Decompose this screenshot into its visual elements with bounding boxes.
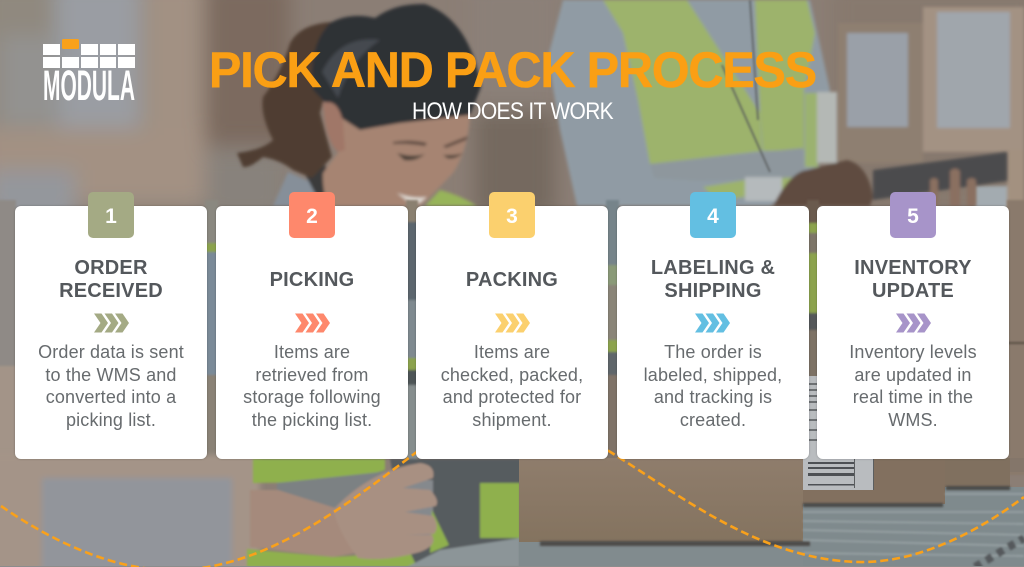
- dashed wave line: [1, 430, 1024, 567]
- description 4: created.: [680, 410, 746, 430]
- description 1: picking list.: [66, 410, 156, 430]
- heading 1: ORDER: [74, 257, 148, 279]
- description 1: Order data is sent: [38, 342, 184, 362]
- woman: [237, 4, 481, 206]
- badge 1: 1: [105, 205, 117, 228]
- bottom scene: [0, 455, 260, 567]
- subtitle: HOW DOES IT WORK: [412, 98, 614, 125]
- badge 5: [890, 192, 936, 238]
- description 2: retrieved from: [255, 365, 369, 385]
- panel: step 5 inventory update: [817, 192, 1009, 459]
- description 5: WMS.: [888, 410, 938, 430]
- panel: step 1 order received: [15, 192, 207, 459]
- description 2: Items are: [274, 342, 350, 362]
- heading 4: LABELING &: [651, 257, 775, 279]
- heading 4: SHIPPING: [664, 280, 762, 302]
- heading 3: PACKING: [466, 269, 558, 291]
- chevrons 1: [94, 314, 129, 332]
- badge 4: [690, 192, 736, 238]
- badge 5: 5: [907, 205, 919, 228]
- heading 5: INVENTORY: [854, 257, 972, 279]
- title: PICK AND PACK PROCESS: [209, 42, 816, 98]
- right background boxes: [838, 7, 1024, 210]
- right worker: [548, 0, 1007, 206]
- shipping label: [803, 376, 874, 490]
- description 4: The order is: [664, 342, 762, 362]
- foreground boxes: [519, 458, 1024, 542]
- badge 4: 4: [707, 205, 719, 228]
- heading 5: UPDATE: [872, 280, 954, 302]
- panel: step 3 packing: [416, 192, 608, 459]
- description 3: checked, packed,: [441, 365, 583, 385]
- conveyor: [0, 486, 1024, 567]
- heading 1: RECEIVED: [59, 280, 163, 302]
- panel: step 2 picking: [216, 192, 408, 459]
- chevrons 2: [295, 314, 330, 332]
- chevrons 5: [896, 314, 931, 332]
- badge 3: [489, 192, 535, 238]
- description 2: storage following: [243, 387, 381, 407]
- description 2: the picking list.: [252, 410, 372, 430]
- logo: [43, 39, 135, 110]
- badge 2: 2: [306, 205, 318, 228]
- description 5: real time in the: [853, 387, 973, 407]
- description 1: to the WMS and: [45, 365, 177, 385]
- text: MODULA: [43, 62, 135, 110]
- chevrons 3: [495, 314, 530, 332]
- description 3: Items are: [474, 342, 550, 362]
- badge 2: [289, 192, 335, 238]
- gaps between cards: [0, 200, 1024, 475]
- description 3: and protected for: [443, 387, 581, 407]
- chevrons 4: [695, 314, 730, 332]
- heading 2: PICKING: [270, 269, 354, 291]
- description 5: Inventory levels: [849, 342, 977, 362]
- badge 3: 3: [506, 205, 518, 228]
- description 5: are updated in: [854, 365, 972, 385]
- description 3: shipment.: [472, 410, 552, 430]
- description 1: converted into a: [46, 387, 177, 407]
- description 4: and tracking is: [654, 387, 772, 407]
- description 4: labeled, shipped,: [644, 365, 782, 385]
- panel: step 4 labeling and shipping: [617, 192, 809, 459]
- badge 1: [88, 192, 134, 238]
